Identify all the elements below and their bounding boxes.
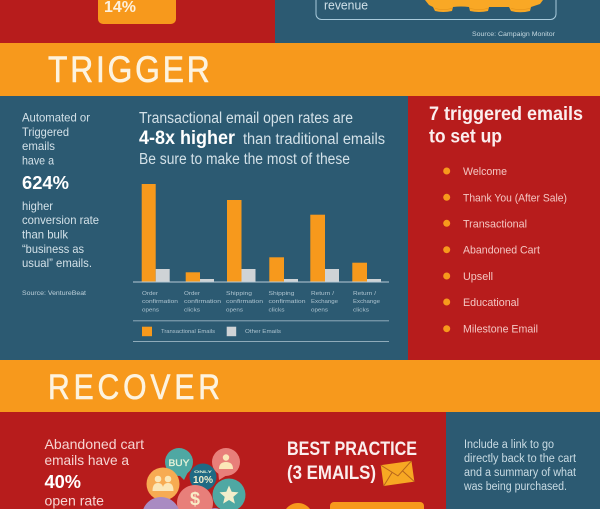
icon cluster: marketing bubbles (143, 448, 245, 509)
icon: people bubble (146, 468, 180, 500)
list of triggered emails: Transactional (463, 218, 527, 230)
chart axis labels: opens (311, 308, 328, 314)
stat box: 14% (98, 0, 176, 24)
text block: 624% conversion stat: higher (22, 199, 53, 213)
chart axis labels: confirmation (268, 299, 306, 305)
chart legend (133, 320, 389, 342)
chart axis labels: clicks (184, 308, 200, 314)
chart axis labels: Shipping (226, 291, 252, 297)
text block: 624% conversion stat: emails (22, 139, 55, 153)
heading band: TRIGGER: TRIGGER (48, 50, 210, 91)
icon: dollar bubble: $ (190, 489, 200, 509)
text block: 624% conversion stat: Source: VentureBeat (22, 290, 86, 297)
list of triggered emails (443, 166, 567, 336)
step one number badge (286, 503, 310, 509)
text block: open rates headline: than traditional emails (243, 131, 385, 148)
text block: 40% open rate: open rate (44, 492, 104, 508)
text block: 40% open rate: Abandoned cart (44, 436, 144, 452)
text block: 624% conversion stat: than bulk (22, 228, 69, 242)
chart legend: Other Emails (245, 329, 281, 335)
icon: coin stacks (425, 0, 543, 12)
text block: 40% open rate (44, 436, 144, 508)
text block: 40% open rate: emails have a (44, 452, 129, 468)
icon: envelope (381, 461, 414, 486)
chart axis labels: Exchange (353, 299, 380, 305)
icon: 10% discount bubble: ONLY (194, 469, 213, 474)
chart axis labels: confirmation (184, 299, 221, 305)
text block: cart link advice: directly back to the cart (464, 453, 577, 465)
icon: purple bubble (143, 497, 179, 509)
heading band: RECOVER (0, 360, 600, 412)
text block: cart link advice: and a summary of what (464, 467, 577, 479)
text block: cart link advice: Include a link to go (464, 439, 554, 451)
text block: 624% conversion stat: “business as (22, 242, 84, 256)
list of triggered emails: Upsell (463, 271, 493, 283)
chart axis labels: opens (142, 308, 159, 314)
icon: small purple bubble (211, 508, 219, 509)
text block: 624% conversion stat: 624% (22, 173, 69, 193)
text block: 624% conversion stat (22, 110, 99, 297)
panel heading: to set up (429, 127, 502, 148)
icon: 10% discount bubble: 10% (193, 475, 213, 486)
list of triggered emails: Educational (463, 297, 519, 309)
text block: cart link advice: was being purchased. (463, 481, 567, 493)
text block: cart link advice (463, 439, 577, 493)
chart axis labels: clicks (268, 308, 285, 314)
panel: cart link tip (446, 412, 600, 509)
text block: 624% conversion stat: Automated or (22, 110, 90, 124)
text block: open rates headline (139, 110, 385, 168)
panel: automated emails and chart (0, 96, 408, 360)
icon: person bubble (212, 448, 240, 480)
chart axis labels: opens (226, 308, 243, 314)
chart axis labels (142, 291, 380, 314)
source: Campaign Monitor: Source: Campaign Monitor (472, 31, 556, 38)
heading: best practice (287, 439, 417, 484)
text block: open rates headline: 4-8x higher (139, 128, 236, 149)
chart axis labels: confirmation (226, 299, 263, 305)
step one box (330, 502, 424, 509)
panel heading: 7 triggered emails (429, 104, 583, 125)
panel: top red stat (0, 0, 275, 43)
heading: best practice: BEST PRACTICE (287, 439, 417, 460)
heading band: RECOVER: RECOVER (48, 367, 220, 407)
chart axis labels: confirmation (142, 299, 178, 305)
text block: 624% conversion stat: conversion rate (22, 213, 99, 227)
revenue callout box (316, 0, 556, 20)
chart axis labels: Order (142, 291, 158, 297)
heading: best practice: (3 EMAILS) (287, 463, 376, 484)
text block: 40% open rate: 40% (44, 472, 81, 492)
text block: open rates headline: Transactional email open rates are (139, 110, 353, 127)
icon: BUY bubble: BUY (168, 458, 190, 468)
list of triggered emails: Milestone Email (463, 324, 538, 336)
text block: 624% conversion stat: have a (22, 154, 54, 168)
panel heading (429, 104, 583, 148)
chart axis labels: Exchange (311, 299, 338, 305)
chart axis labels: Shipping (268, 291, 294, 297)
icon: 10% discount bubble (190, 464, 216, 490)
panel: abandoned cart (0, 412, 446, 509)
bar chart: open and click rates (133, 184, 389, 314)
chart axis labels: Return / (353, 291, 377, 297)
icon: star bubble (212, 478, 245, 509)
panel: top blue revenue (275, 0, 600, 43)
list of triggered emails: Thank You (After Sale) (463, 192, 567, 204)
heading band: TRIGGER (0, 43, 600, 96)
list of triggered emails: Welcome (463, 166, 507, 178)
list of triggered emails: Abandoned Cart (463, 245, 540, 257)
chart axis labels: Order (184, 291, 200, 297)
text block: 624% conversion stat: Triggered (22, 125, 69, 139)
panel: 7 triggered emails (408, 96, 600, 360)
text block: open rates headline: Be sure to make the most of these (139, 151, 350, 168)
chart legend: Transactional Emails (161, 329, 215, 335)
chart axis labels: clicks (353, 308, 369, 314)
text block: 624% conversion stat: usual” emails. (22, 256, 92, 270)
chart axis labels: Return / (311, 291, 335, 297)
